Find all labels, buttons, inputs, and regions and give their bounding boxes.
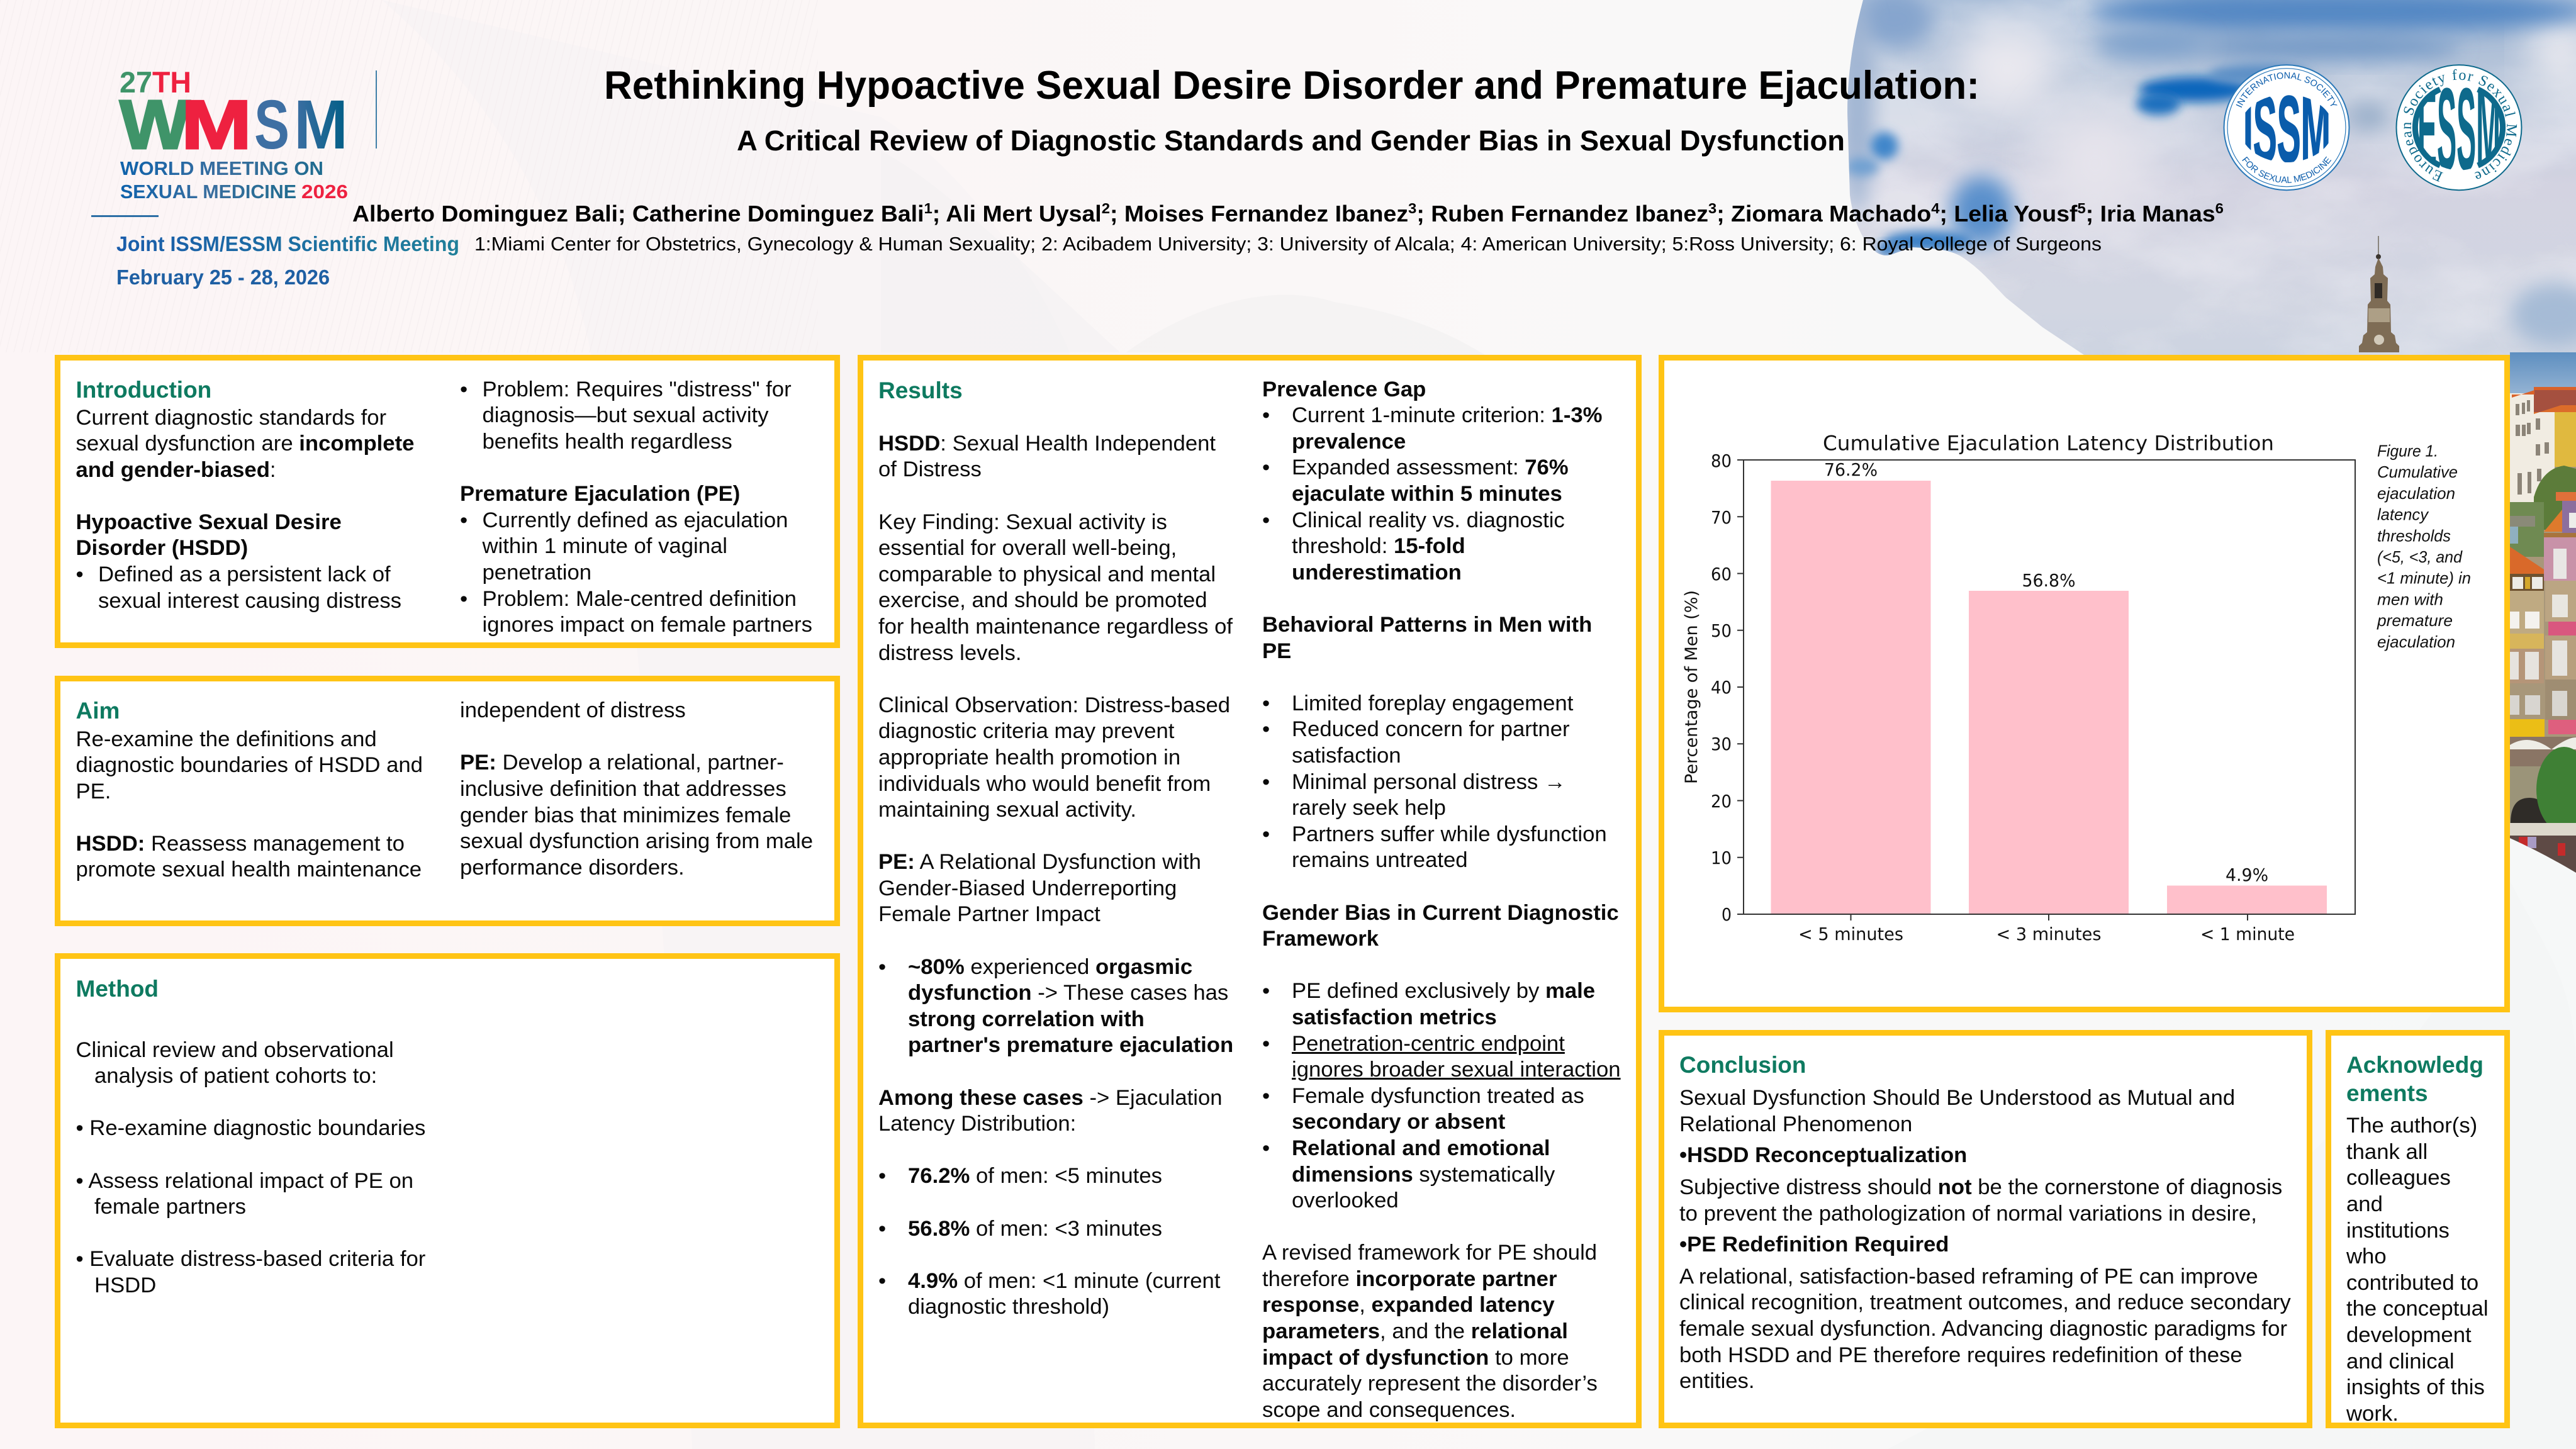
panel: results xyxy=(858,355,1642,1428)
text: results right column: response, expanded latency xyxy=(1262,1293,1555,1317)
text: conclusion body: Sexual Dysfunction Should Be Understood as Mutual and xyxy=(1679,1086,2235,1110)
text: results left column: ~80% experienced orgasmic xyxy=(908,955,1192,979)
text: conclusion body: •PE Redefinition Required xyxy=(1679,1233,1949,1256)
text: results right column: PE defined exclusively by male xyxy=(1292,979,1595,1003)
text: conclusion body: both HSDD and PE therefore requires redefinition of these xyxy=(1679,1343,2243,1367)
bar value labels: 4.9% xyxy=(2226,864,2268,885)
text: results left column: appropriate health promotion in xyxy=(878,746,1180,769)
text: introduction right column: Problem: Male-centred definition xyxy=(482,587,797,611)
heading: acknowledgements: ements xyxy=(2346,1080,2428,1106)
text: results right column: satisfaction metrics xyxy=(1292,1005,1497,1029)
figure caption: thresholds xyxy=(2377,526,2451,545)
text: aim right column: gender bias that minimizes female xyxy=(460,803,791,827)
text: results right column: Prevalence Gap xyxy=(1262,378,1426,401)
text: introduction right column: penetration xyxy=(482,561,591,585)
text: method body: HSDD xyxy=(94,1273,156,1297)
text: acknowledgements body xyxy=(2346,1114,2489,1426)
title: Rethinking Hypoactive Sexual Desire Disorder and Premature Ejaculation: xyxy=(604,64,1980,108)
plot frame and ticks xyxy=(1737,460,2355,920)
figure caption: ejaculation xyxy=(2377,484,2455,503)
text: method body: • Assess relational impact of PE on xyxy=(76,1169,413,1193)
conference logo: M xyxy=(294,86,348,164)
text: results left column: diagnostic threshold) xyxy=(908,1295,1109,1319)
authors: ; Ziomara Machado xyxy=(1716,201,1931,227)
ISSM logo xyxy=(2224,64,2349,191)
clock tower xyxy=(2359,236,2399,352)
text: aim right column: sexual dysfunction arising from male xyxy=(460,829,813,853)
text: results right column: prevalence xyxy=(1292,430,1406,454)
text: aim left column xyxy=(76,727,423,881)
conference logo: February 25 - 28, 2026 xyxy=(116,266,330,289)
text: aim right column: independent of distress xyxy=(460,698,686,722)
conference logo: 2026 xyxy=(301,181,348,203)
text: results right column: underestimation xyxy=(1292,561,1462,585)
text: results right column: rarely seek help xyxy=(1292,796,1446,820)
background with sky, clock tower and town xyxy=(1847,0,2576,873)
text: introduction right column: Premature Ejaculation (PE) xyxy=(460,482,740,506)
text: aim left column: Re-examine the definitions and xyxy=(76,727,377,751)
panel: introduction xyxy=(55,355,840,648)
x axis labels xyxy=(1798,924,2295,944)
text: acknowledgements body: and xyxy=(2346,1192,2383,1216)
text: acknowledgements body: development xyxy=(2346,1323,2472,1347)
bar value labels: 56.8% xyxy=(2022,570,2075,591)
text: acknowledgements body: work. xyxy=(2346,1402,2399,1426)
text: results left column: Gender-Biased Underreporting xyxy=(878,876,1177,900)
bar value labels xyxy=(1824,459,2268,885)
text: aim right column xyxy=(460,698,813,880)
text: aim left column: diagnostic boundaries of HSDD and xyxy=(76,753,423,777)
text: results right column: Reduced concern for partner xyxy=(1292,717,1570,741)
x axis labels: < 3 minutes xyxy=(1996,924,2102,944)
bars xyxy=(1771,481,2327,914)
text: results right column xyxy=(1262,378,1621,1422)
text: aim left column: PE. xyxy=(76,780,111,803)
text: results right column: secondary or absent xyxy=(1292,1110,1505,1134)
y axis tick labels: 70 xyxy=(1711,507,1732,528)
conference logo: Joint ISSM/ESSM Scientific Meeting xyxy=(116,232,459,255)
text: method body: female partners xyxy=(94,1195,246,1219)
text: aim right column: inclusive definition that addresses xyxy=(460,777,787,801)
text: results right column: dimensions systematically xyxy=(1292,1163,1555,1187)
panel: aim xyxy=(55,676,840,926)
text: results right column: Current 1-minute criterion: 1-3% xyxy=(1292,403,1603,427)
heading: results: Results xyxy=(878,378,963,403)
authors: ; Ruben Fernandez Ibanez xyxy=(1416,201,1708,227)
text: conclusion body: clinical recognition, treatment outcomes, and reduce secondary xyxy=(1679,1290,2291,1314)
text: results left column: distress levels. xyxy=(878,641,1021,665)
text: results right column: remains untreated xyxy=(1292,848,1468,872)
text: introduction right column xyxy=(460,378,812,637)
authors: 3 xyxy=(1408,200,1416,216)
text: aim left column: HSDD: Reassess management to xyxy=(76,832,405,856)
authors: ; Ali Mert Uysal xyxy=(932,201,1102,227)
text: conclusion body xyxy=(1679,1086,2291,1393)
figure caption: latency xyxy=(2377,505,2429,524)
text: results right column: Clinical reality vs. diagnostic xyxy=(1292,508,1565,532)
text: aim left column: promote sexual health maintenance xyxy=(76,858,422,881)
text: results left column: Latency Distribution: xyxy=(878,1112,1076,1136)
text: results left column: Clinical Observation: Distress-based xyxy=(878,693,1230,717)
ISSM logo: INTERNATIONAL SOCIETY xyxy=(2236,72,2338,108)
text: introduction right column: benefits health regardless xyxy=(482,430,732,454)
authors: ; Lelia Yousf xyxy=(1940,201,2078,227)
poster header xyxy=(91,64,2522,289)
affiliations: 1:Miami Center for Obstetrics, Gynecology & Human Sexuality; 2: Acibadem University; 3: University of Alcala; 4: American University; 5:Ross University; 6: Royal College of Surgeons xyxy=(474,233,2102,255)
text: results left column: 56.8% of men: <3 minutes xyxy=(908,1217,1162,1241)
conference logo: SEXUAL MEDICINE xyxy=(120,181,296,203)
text: results right column: scope and consequences. xyxy=(1262,1398,1516,1422)
text: results right column: therefore incorporate partner xyxy=(1262,1267,1557,1291)
text: results right column: A revised framework for PE should xyxy=(1262,1241,1597,1265)
authors: 5 xyxy=(2078,200,2086,216)
y axis tick labels: 10 xyxy=(1711,848,1732,868)
text: conclusion body: to prevent the pathologization of normal variations in desire, xyxy=(1679,1202,2257,1226)
text: results left column: Key Finding: Sexual activity is xyxy=(878,510,1167,534)
x axis labels: < 1 minute xyxy=(2200,924,2295,944)
text: results right column: Framework xyxy=(1262,927,1379,951)
text: results left column: diagnostic criteria may prevent xyxy=(878,719,1174,743)
text: introduction left column: sexual dysfunction are incomplete xyxy=(76,432,414,456)
ESSM logo: European Society for Sexual Medicine xyxy=(2404,69,2517,182)
text: results left column: partner's premature ejaculation xyxy=(908,1033,1233,1057)
text: results left column: of Distress xyxy=(878,457,982,481)
conference logo: M xyxy=(181,86,252,164)
y axis tick labels: 20 xyxy=(1711,791,1732,812)
text: results left column: comparable to physical and mental xyxy=(878,562,1216,586)
text: results left column: 76.2% of men: <5 minutes xyxy=(908,1164,1162,1188)
text: introduction right column: within 1 minute of vaginal xyxy=(482,534,727,558)
text: acknowledgements body: colleagues xyxy=(2346,1166,2451,1190)
text: acknowledgements body: institutions xyxy=(2346,1219,2450,1243)
authors: 1 xyxy=(924,200,932,216)
text: results right column: Behavioral Patterns in Men with xyxy=(1262,613,1592,637)
authors: ; Iria Manas xyxy=(2086,201,2215,227)
text: results left column xyxy=(878,432,1233,1319)
authors: Alberto Dominguez Bali; Catherine Dominguez Bali xyxy=(352,201,902,227)
text: results right column: ignores broader sexual interaction xyxy=(1292,1058,1621,1082)
text: introduction right column: Problem: Requires "distress" for xyxy=(482,378,792,401)
text: results left column: Female Partner Impact xyxy=(878,902,1100,926)
text: results right column: overlooked xyxy=(1292,1189,1399,1212)
subtitle: A Critical Review of Diagnostic Standards and Gender Bias in Sexual Dysfunction xyxy=(737,125,1845,157)
text: results left column: PE: A Relational Dysfunction with xyxy=(878,850,1201,874)
text: acknowledgements body: and clinical xyxy=(2346,1350,2455,1373)
text: results left column: maintaining sexual activity. xyxy=(878,798,1136,822)
figure caption: <1 minute) in xyxy=(2377,569,2471,588)
text: results right column: Partners suffer while dysfunction xyxy=(1292,822,1607,846)
authors: ; Moises Fernandez Ibanez xyxy=(1110,201,1408,227)
text: results right column: Female dysfunction treated as xyxy=(1292,1084,1584,1108)
y axis tick labels: 50 xyxy=(1711,620,1732,641)
bar value labels: 76.2% xyxy=(1824,459,1878,480)
text: acknowledgements body: thank all xyxy=(2346,1140,2428,1164)
figure caption: men with xyxy=(2377,590,2443,608)
text: results left column: strong correlation with xyxy=(908,1007,1145,1031)
text: introduction right column: diagnosis—but sexual activity xyxy=(482,403,769,427)
chart title: Cumulative Ejaculation Latency Distribution xyxy=(1823,432,2274,456)
panel: acknowledgements xyxy=(2326,1030,2510,1428)
text: results right column: Penetration-centric endpoint xyxy=(1292,1032,1565,1056)
conference logo: TH xyxy=(152,65,191,99)
authors: 2 xyxy=(1102,200,1110,216)
text: method body: Clinical review and observational xyxy=(76,1038,394,1062)
y axis tick labels: 40 xyxy=(1711,677,1732,698)
text: acknowledgements body: contributed to xyxy=(2346,1271,2478,1295)
conference logo: S xyxy=(254,86,289,164)
text: results left column: essential for overall well-being, xyxy=(878,536,1177,560)
panel: figure 1 xyxy=(1659,355,2510,1012)
conference logo: WORLD MEETING ON xyxy=(120,157,323,179)
text: introduction left column: Hypoactive Sexual Desire xyxy=(76,510,342,534)
text: introduction right column: ignores impact on female partners xyxy=(482,613,812,637)
text: results right column: Gender Bias in Current Diagnostic xyxy=(1262,901,1619,925)
text: introduction left column: Defined as a persistent lack of xyxy=(98,562,391,586)
text: results right column: parameters, and the relational xyxy=(1262,1319,1568,1343)
text: method body: • Re-examine diagnostic boundaries xyxy=(76,1116,425,1140)
text: results left column: for health maintenance regardless of xyxy=(878,615,1233,639)
figure caption: (<5, <3, and xyxy=(2377,547,2463,566)
x axis labels: < 5 minutes xyxy=(1798,924,1903,944)
text: conclusion body: entities. xyxy=(1679,1369,1755,1393)
heading: aim: Aim xyxy=(76,698,120,724)
text: acknowledgements body: The author(s) xyxy=(2346,1114,2477,1138)
text: results right column: accurately represent the disorder’s xyxy=(1262,1372,1598,1396)
text: conclusion body: •HSDD Reconceptualization xyxy=(1679,1143,1967,1167)
figure caption xyxy=(2377,442,2471,651)
text: method body xyxy=(76,1038,425,1297)
panel: method xyxy=(55,953,840,1428)
text: aim right column: PE: Develop a relational, partner- xyxy=(460,751,784,775)
ISSM logo: FOR SEXUAL MEDICINE xyxy=(2242,156,2332,183)
figure caption: ejaculation xyxy=(2377,632,2455,651)
y axis tick labels: 30 xyxy=(1711,734,1732,754)
text: acknowledgements body: who xyxy=(2346,1245,2387,1268)
text: introduction left column: and gender-biased: xyxy=(76,458,276,482)
heading: conclusion: Conclusion xyxy=(1679,1052,1806,1078)
text: aim right column: performance disorders. xyxy=(460,856,685,880)
text: results right column: Expanded assessment: 76% xyxy=(1292,456,1569,479)
conference logo: W xyxy=(120,86,190,164)
town photo xyxy=(2510,352,2576,875)
text: results right column: threshold: 15-fold xyxy=(1292,534,1465,558)
authors: 3 xyxy=(1708,200,1716,216)
text: method body: • Evaluate distress-based criteria for xyxy=(76,1247,425,1271)
text: results left column: dysfunction -> These cases has xyxy=(908,981,1228,1005)
authors: 6 xyxy=(2215,200,2224,216)
heading: acknowledgements: Acknowledg xyxy=(2346,1052,2484,1078)
text: conclusion body: Relational Phenomenon xyxy=(1679,1112,1912,1136)
text: conclusion body: female sexual dysfunction. Advancing diagnostic paradigms for xyxy=(1679,1317,2287,1341)
figure caption: premature xyxy=(2377,611,2453,630)
text: introduction left column: sexual interest causing distress xyxy=(98,589,401,613)
text: method body: analysis of patient cohorts to: xyxy=(94,1064,377,1088)
text: results left column: exercise, and should be promoted xyxy=(878,588,1207,612)
figure caption: Cumulative xyxy=(2377,462,2458,481)
y axis tick labels: 0 xyxy=(1722,904,1732,925)
bar chart: cumulative ejaculation latency distribution xyxy=(1682,432,2471,944)
text: results right column: impact of dysfunction to more xyxy=(1262,1346,1569,1370)
text: introduction left column xyxy=(76,405,414,613)
text: introduction left column: Disorder (HSDD) xyxy=(76,536,248,560)
heading: acknowledgements xyxy=(2346,1052,2484,1106)
text: results left column: individuals who would benefit from xyxy=(878,772,1211,796)
text: conclusion body: A relational, satisfaction-based reframing of PE can improve xyxy=(1679,1265,2258,1289)
text: results right column: ejaculate within 5 minutes xyxy=(1292,482,1562,506)
text: results right column: Limited foreplay engagement xyxy=(1292,691,1573,715)
text: results right column: Relational and emotional xyxy=(1292,1136,1550,1160)
heading: method: Method xyxy=(76,976,159,1002)
text: acknowledgements body: insights of this xyxy=(2346,1375,2485,1399)
text: conclusion body: Subjective distress should not be the cornerstone of diagnosis xyxy=(1679,1175,2282,1199)
panel: conclusion xyxy=(1659,1030,2312,1428)
y axis label: Percentage of Men (%) xyxy=(1682,590,1701,784)
text: acknowledgements body: the conceptual xyxy=(2346,1297,2489,1321)
poster header: ISSM xyxy=(2243,76,2331,182)
conference logo: 27 xyxy=(120,65,152,99)
text: introduction right column: Currently defined as ejaculation xyxy=(482,508,788,532)
text: results right column: PE xyxy=(1262,639,1291,663)
text: results left column: Among these cases -> Ejaculation xyxy=(878,1086,1223,1110)
text: results left column: HSDD: Sexual Health Independent xyxy=(878,432,1216,456)
conference logo xyxy=(91,65,459,289)
text: introduction left column: Current diagnostic standards for xyxy=(76,405,386,429)
y axis tick labels: 80 xyxy=(1711,450,1732,471)
text: results right column: Minimal personal distress → xyxy=(1292,770,1566,794)
text: results left column: 4.9% of men: <1 minute (current xyxy=(908,1269,1220,1293)
heading: introduction: Introduction xyxy=(76,377,211,403)
authors: 4 xyxy=(1931,200,1940,216)
figure caption: Figure 1. xyxy=(2377,442,2438,461)
y axis tick labels: 60 xyxy=(1711,564,1732,585)
text: results right column: satisfaction xyxy=(1292,744,1401,768)
y axis tick labels xyxy=(1711,450,1732,925)
